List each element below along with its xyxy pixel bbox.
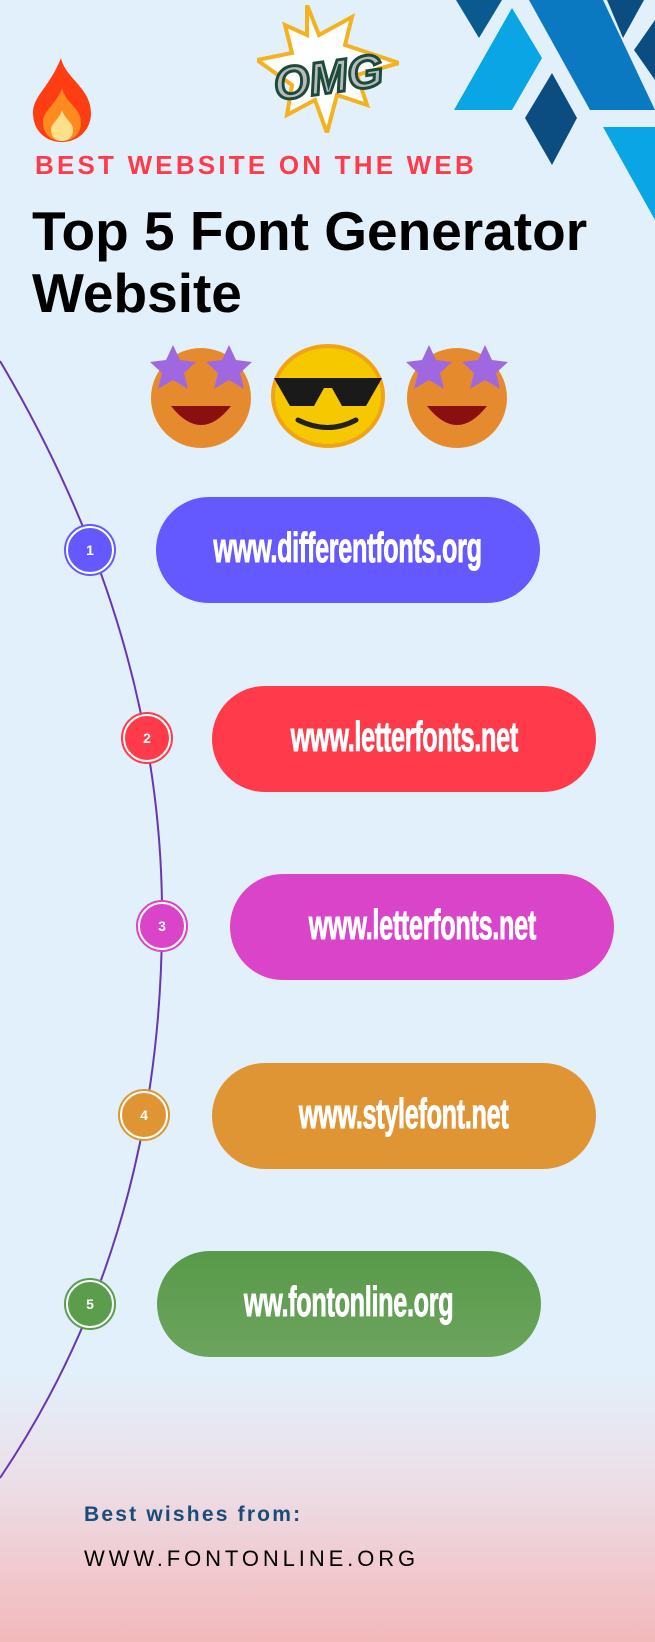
step 1 marker: 1 (86, 542, 94, 558)
step 2 marker: 2 (143, 730, 151, 746)
icon: OMG burst: OMG (270, 44, 386, 110)
emojis (150, 344, 508, 448)
footer: best wishes: Best wishes from: (84, 1503, 302, 1526)
step 2 pill (212, 686, 596, 792)
step 3 pill: www.letterfonts.net (308, 901, 536, 948)
step 5 pill: ww.fontonline.org (244, 1278, 454, 1325)
step 4 marker: 4 (140, 1107, 148, 1123)
icon: fire (32, 58, 91, 142)
step 1 pill: www.differentfonts.org (214, 524, 482, 571)
step 3 marker (138, 902, 186, 950)
subtitle: BEST WEBSITE ON THE WEB (35, 150, 477, 180)
emoji: star eyes right (406, 345, 508, 448)
decorative blue shapes (454, 0, 655, 220)
title: Top 5 Font Generator (32, 200, 587, 262)
title: Website (32, 262, 242, 324)
step 4 pill (212, 1063, 596, 1169)
step 1 pill (156, 497, 540, 603)
step 3 marker: 3 (158, 918, 166, 934)
footer: website: WWW.FONTONLINE.ORG (84, 1546, 419, 1571)
step 5 marker (66, 1280, 114, 1328)
step 2 marker (123, 714, 171, 762)
icon: OMG burst (257, 5, 399, 133)
step 4 pill: www.stylefont.net (299, 1090, 509, 1137)
emoji: sunglasses (271, 344, 385, 448)
step 5 pill (157, 1251, 541, 1357)
step 1 marker (66, 526, 114, 574)
emoji: star eyes left (150, 345, 252, 448)
step 4 marker (120, 1091, 168, 1139)
step 2 pill: www.letterfonts.net (290, 713, 518, 760)
step 3 pill (230, 874, 614, 980)
step 5 marker: 5 (86, 1296, 94, 1312)
title (32, 200, 587, 324)
